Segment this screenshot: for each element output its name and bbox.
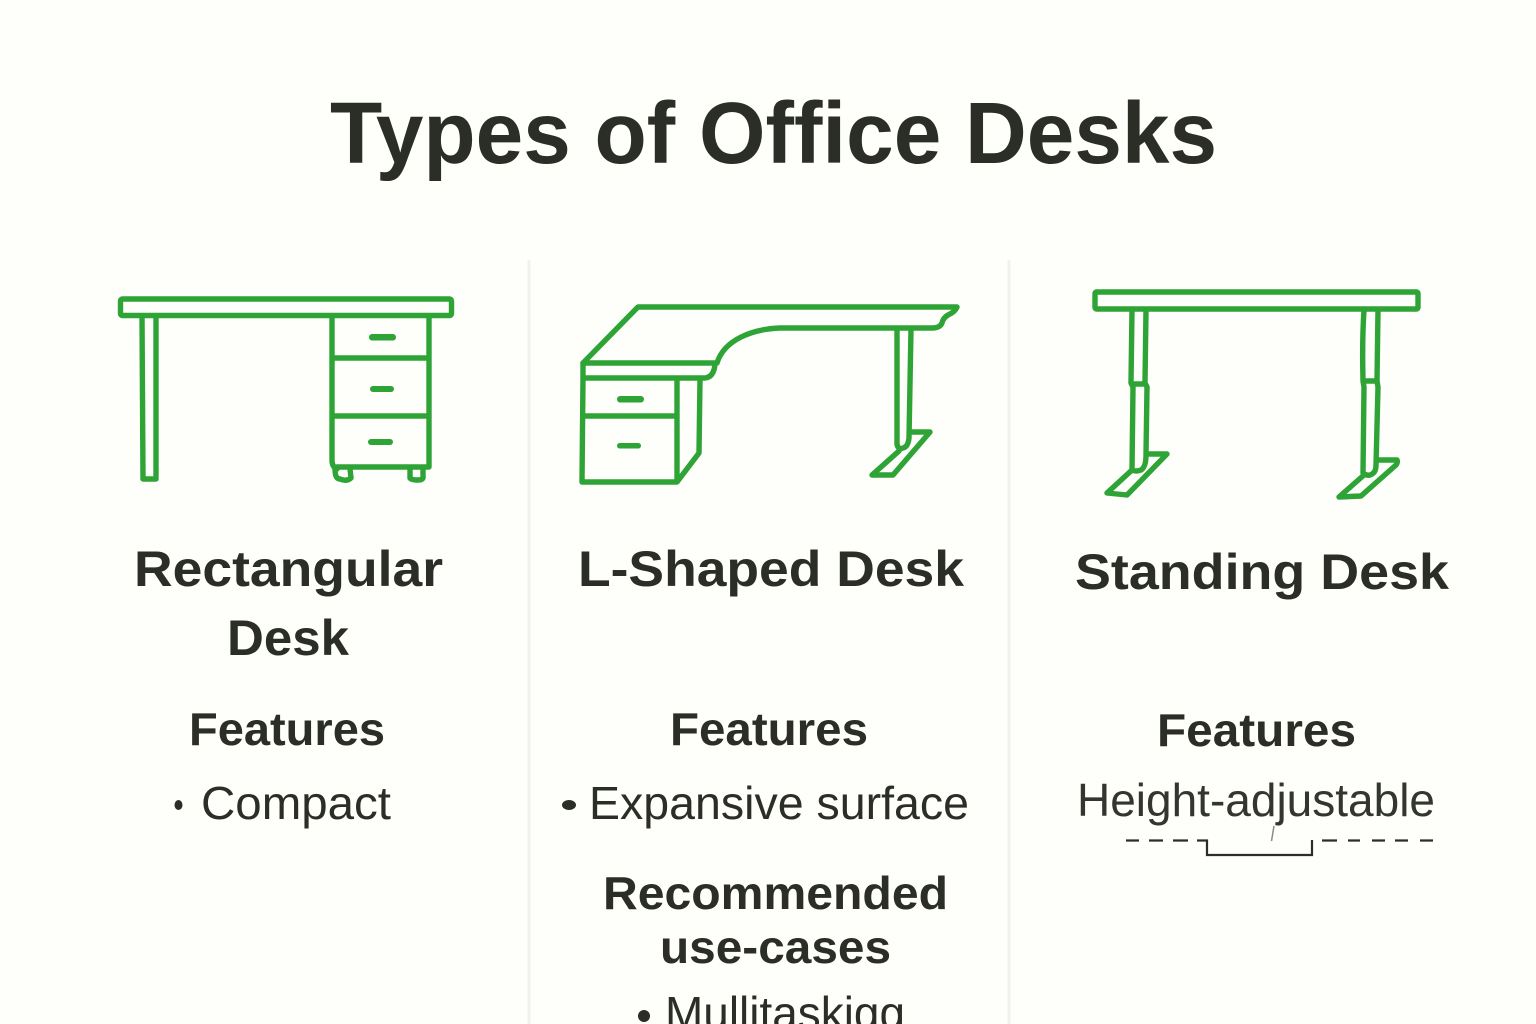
features heading: Features (189, 703, 385, 755)
heading line: desk: Desk (227, 610, 349, 666)
feature text: Expansive surface (589, 777, 969, 829)
icon: standing desk (1095, 292, 1418, 497)
icon: l-shaped desk (582, 307, 957, 482)
heading: rectangular desk: Rectangular (134, 541, 443, 597)
feature bullet (174, 800, 182, 810)
heading: l-shaped desk: L-Shaped Desk (578, 541, 964, 597)
dashed bracket underline (1126, 826, 1433, 855)
icon: rectangular desk (120, 299, 452, 480)
heading: standing desk: Standing Desk (1075, 544, 1449, 600)
feature text: Compact (201, 777, 391, 829)
panel: rectangular desk (120, 299, 452, 829)
recommended use-cases heading: Recommended (603, 867, 948, 919)
panel: standing desk (1075, 292, 1449, 855)
feature text: Height-adjustable (1077, 774, 1435, 826)
recommended use-cases heading second line: use-cases (660, 921, 891, 973)
use-case bullet (638, 1010, 650, 1022)
features heading: Features (1157, 704, 1356, 756)
title: Types of Office Desks (330, 85, 1217, 182)
features heading: Features (670, 703, 868, 755)
feature bullet (562, 800, 576, 810)
panel: l-shaped desk (562, 307, 969, 1024)
